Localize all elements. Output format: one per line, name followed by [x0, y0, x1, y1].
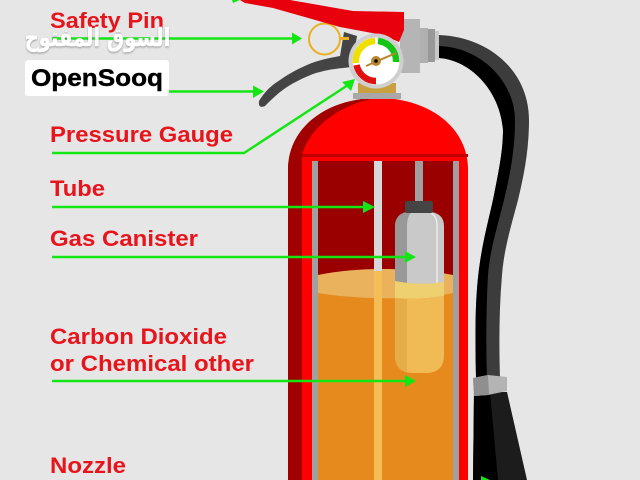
lower handle: [259, 32, 357, 107]
label: Gas Canister: Gas Canister: [50, 226, 198, 251]
safety pin ring: [309, 24, 349, 54]
watermark: Arabic name: السوق المفتوح: [25, 24, 170, 53]
hose: [439, 35, 529, 378]
cylinder body: [288, 98, 468, 480]
arrow: safety pin: [52, 32, 302, 44]
nozzle: [473, 375, 527, 480]
label: Carbon Dioxide or Chemical other: Carbon Dioxide: [50, 324, 227, 349]
watermark: OpenSooq badge: OpenSooq: [31, 65, 163, 92]
label: Carbon Dioxide or Chemical other: [50, 324, 254, 376]
cylinder interior: [312, 161, 459, 480]
label: Pressure Gauge: Pressure Gauge: [50, 122, 233, 147]
upper lever: [240, 0, 404, 42]
label: Tube: Tube: [50, 176, 105, 201]
liquid: [318, 283, 453, 480]
arrow: lever: [232, 0, 240, 3]
arrow: handle: [52, 86, 264, 98]
pressure gauge: [348, 34, 404, 88]
label: Carbon Dioxide or Chemical other: or Chemical other: [50, 351, 254, 376]
valve assembly: [353, 19, 439, 99]
arrow: gas canister: [52, 251, 416, 263]
label: Nozzle: Nozzle: [50, 453, 126, 478]
tube rods: [312, 161, 459, 480]
arrow: pressure gauge: [52, 79, 355, 153]
arrow: tube: [52, 201, 375, 213]
watermark: OpenSooq badge: [25, 60, 169, 96]
arrow: carbon dioxide: [52, 375, 416, 387]
label: Safety Pin: Safety Pin: [50, 8, 164, 33]
arrow: nozzle: [481, 476, 490, 480]
gas canister: [395, 201, 444, 373]
